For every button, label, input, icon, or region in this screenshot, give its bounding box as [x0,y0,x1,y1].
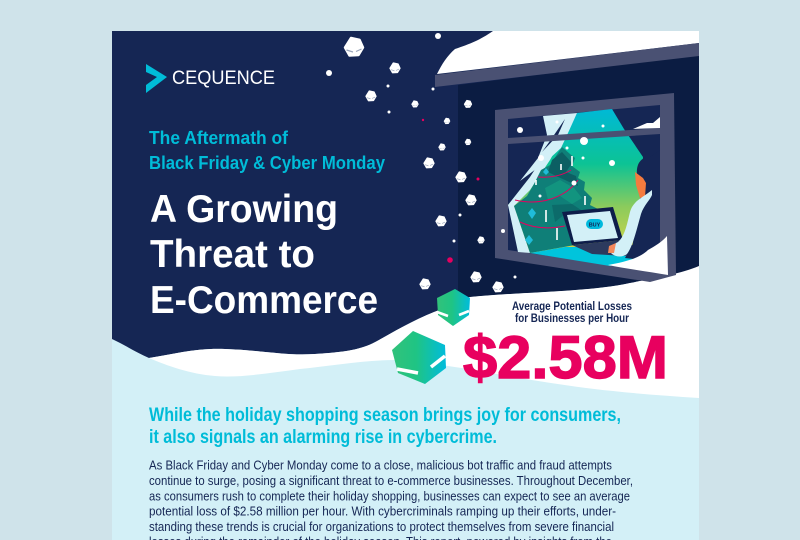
icon: chevron [146,64,167,93]
illustration: window scene [495,93,676,282]
roof beam [435,43,699,87]
curtain [508,113,577,253]
christmas tree [514,147,600,253]
title: A Growing [150,188,338,231]
house wall [458,55,699,300]
subtitle [149,128,385,173]
stat value: $2.58M [463,324,668,391]
window sash bar [508,128,660,144]
snow on sill [608,236,668,275]
laptop: BUY [589,222,601,228]
roof snow [437,31,699,74]
body text [149,458,633,540]
subtitle: The Aftermath of [149,128,289,148]
ornaments [528,208,536,219]
heading: While the holiday shopping season brings joy for consumers, [149,405,621,426]
stat label: Average Potential Losses [512,301,632,313]
garlands [515,170,578,228]
logo: Cequence [146,64,275,93]
body text: continue to surge, posing a significant threat to e-commerce businesses. Throughout December, [149,473,633,488]
window frame [495,93,676,282]
laptop [562,207,641,256]
icon: small green hexagon [437,289,470,326]
person [608,150,660,262]
subtitle: Black Friday & Cyber Monday [149,153,385,173]
body text: As Black Friday and Cyber Monday come to a close, malicious bot traffic and fraud attempts [149,458,612,472]
cut in curtain [542,119,565,152]
panel: light blue body background [112,266,699,540]
heading [149,405,621,448]
glowing sky [508,109,643,253]
window interior [508,105,660,272]
buy button [586,219,603,229]
snow drift [149,266,699,398]
title: E-Commerce [150,279,378,322]
blanket [530,247,645,266]
body text: potential loss of $2.58 million per hour. With cybercriminals ramping up their efforts, under- [149,504,616,519]
title [150,188,378,322]
body text: as consumers rush to complete their holiday shopping, businesses can expect to see an average [149,488,630,503]
candles [536,156,585,240]
snow on upper pane [633,117,660,129]
stat label: for Businesses per Hour [515,313,629,325]
icon: large green hexagon [392,331,446,384]
stat label [512,301,632,325]
panel: dark navy hero [112,31,699,540]
heading: it also signals an alarming rise in cybercrime. [149,427,497,448]
snowflakes [326,33,615,292]
title: Threat to [150,233,315,276]
body text: standing these trends is crucial for organizations to protect themselves from severe financial [149,519,614,534]
wordmark: CEQUENCE [172,68,275,89]
